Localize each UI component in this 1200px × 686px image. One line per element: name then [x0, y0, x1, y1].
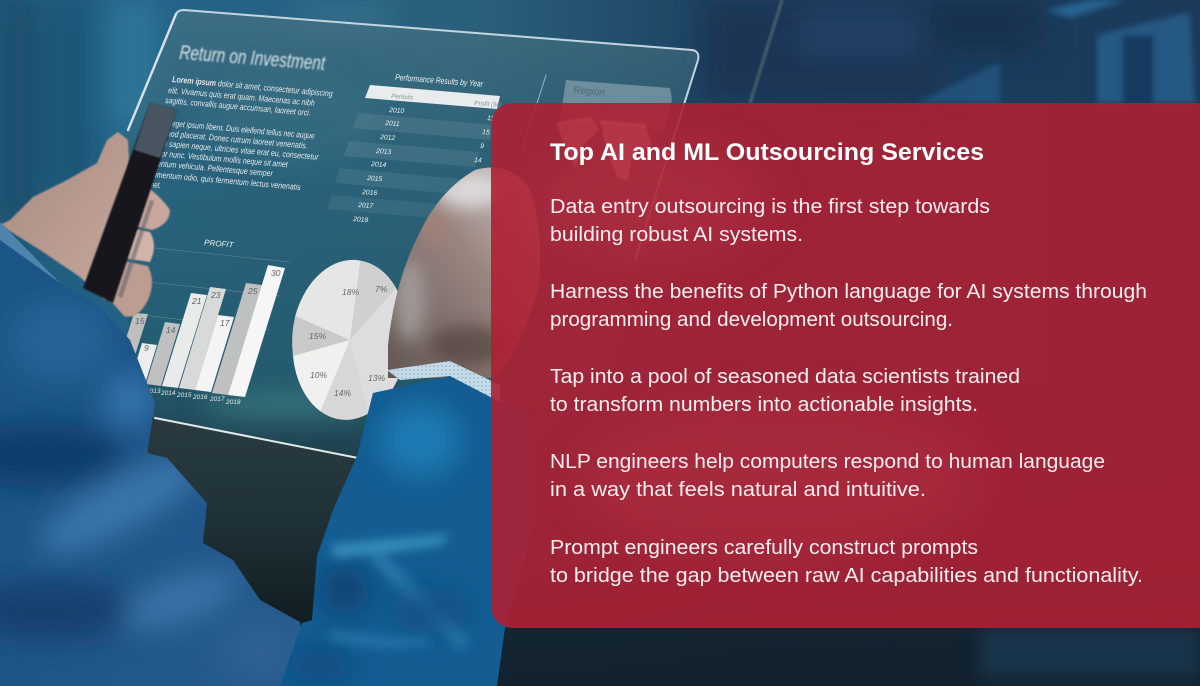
profit bar chart: 17: [220, 318, 230, 328]
performance results table: Periods: [391, 93, 414, 102]
profit bar chart: 21: [191, 296, 202, 306]
point 4: NLP engineers: in a way that feels natural and intuitive.: [550, 478, 926, 501]
pie chart: 14%: [334, 388, 351, 398]
screen body copy: Lorem ipsum dolor sit amet, consectetur adipiscing: [172, 74, 333, 99]
dark area below the tablet: [130, 412, 372, 650]
screen body copy: Sed eget ipsum libero. Duis eleifend tellus nec augue: [158, 117, 315, 141]
heading: Top AI and ML Outsourcing Services: [550, 139, 984, 166]
performance results table: 2010: [388, 107, 405, 115]
performance results table: 2015: [366, 175, 383, 183]
performance results table: 11: [487, 115, 495, 123]
performance results table: 14: [474, 157, 482, 165]
screen body copy: elit. Vivamus quis erat quam. Maecenas ac nibh: [168, 85, 315, 108]
point 1: data entry: Data entry outsourcing is the first step towards: [550, 195, 990, 218]
point 2: python development: Harness the benefits of Python language for AI systems through: [550, 280, 1147, 303]
performance results table: 2017: [357, 202, 374, 210]
region selector: Region: [573, 85, 606, 99]
screen body copy: Etiam sapien neque, ultricies vitae erat eu, consectetur: [149, 137, 320, 162]
performance results table: 2013: [375, 148, 392, 156]
palm and thumb: [0, 132, 129, 300]
performance results table: 2014: [370, 161, 387, 169]
profit bar chart: 2016: [192, 394, 208, 401]
performance results table: 9: [480, 143, 484, 150]
profit bar chart: 2017: [209, 396, 225, 403]
tablet frame highlights: [128, 10, 698, 458]
pie chart: [284, 254, 415, 426]
profit bar chart: 2013: [145, 388, 161, 395]
glass tablet: [113, 10, 698, 458]
red translucent panel: [491, 103, 1200, 628]
profit bar chart: 9: [144, 343, 149, 353]
screen heading: Return on Investment: [179, 42, 327, 75]
point 2: python development: programming and development outsourcing.: [550, 308, 953, 331]
panel: services: [491, 103, 1200, 628]
point 1: data entry: building robust AI systems.: [550, 223, 803, 246]
pie chart: 13%: [368, 373, 385, 383]
point 3: data scientists: to transform numbers into actionable insights.: [550, 393, 978, 416]
right sleeve of blue suit: [280, 376, 506, 686]
profit bar chart: 15: [135, 316, 145, 326]
region selector: [560, 80, 672, 130]
profit bar chart: 2018: [225, 399, 241, 406]
point 5: prompt engineers: Prompt engineers carefully construct prompts: [550, 536, 978, 559]
point 4: NLP engineers: NLP engineers help computers respond to human language: [550, 450, 1105, 473]
screen body copy: condimentum odio, quis fermentum lectus venenatis: [140, 168, 302, 192]
performance results table: 2018: [352, 216, 369, 224]
performance results table: 2012: [379, 134, 396, 142]
pie chart: 18%: [342, 287, 359, 297]
performance results table: 2011: [384, 120, 400, 128]
performance results table: 2016: [361, 189, 378, 197]
point 3: data scientists: [550, 365, 1020, 416]
tablet glass pane: [125, 10, 698, 458]
man's left hand and phone: [0, 103, 177, 317]
performance results table: Profit (M): [474, 100, 501, 109]
profit bar chart: 2014: [160, 390, 176, 397]
pie chart: 10%: [310, 370, 327, 380]
screen body copy: fermentum vehicula. Pellentesque semper: [143, 157, 274, 178]
point 2: python development: [550, 280, 1147, 331]
fingers: [110, 182, 170, 317]
point 3: data scientists: Tap into a pool of seasoned data scientists trained: [550, 365, 1020, 388]
left sleeve of blue suit: [0, 222, 301, 686]
screen body copy: sagittis, convallis augue accumsan, laoreet orci.: [165, 95, 311, 118]
point 1: data entry: [550, 195, 990, 246]
screen body copy: tempor nunc. Vestibulum mollis neque sit amet: [146, 147, 289, 169]
point 5: prompt engineers: [550, 536, 1143, 587]
screen body copy: [137, 74, 333, 192]
faint world map: [556, 117, 652, 180]
profit bar chart: 2015: [176, 392, 192, 399]
man's right hand: [388, 168, 540, 378]
performance results table: [327, 72, 501, 224]
profit bar chart: [113, 238, 290, 406]
pie chart: 15%: [309, 331, 326, 341]
point 4: NLP engineers: [550, 450, 1105, 501]
pie chart: 7%: [375, 284, 388, 294]
profit bar chart: PROFIT: [204, 238, 235, 250]
profit bar chart: 30: [271, 268, 281, 278]
screen body copy: sit amet.: [137, 178, 162, 190]
performance results table: Performance Results by Year: [395, 72, 484, 89]
profit bar chart: 14: [166, 325, 176, 335]
profit bar chart: 23: [210, 290, 221, 300]
smartphone: [83, 103, 177, 303]
profit bar chart: 25: [247, 286, 258, 296]
shirt cuff: [387, 361, 500, 402]
screen body copy: euismod placerat. Donec rutrum laoreet venenatis.: [152, 127, 308, 151]
point 5: prompt engineers: to bridge the gap between raw AI capabilities and functionality.: [550, 564, 1143, 587]
performance results table: 15: [482, 129, 490, 137]
